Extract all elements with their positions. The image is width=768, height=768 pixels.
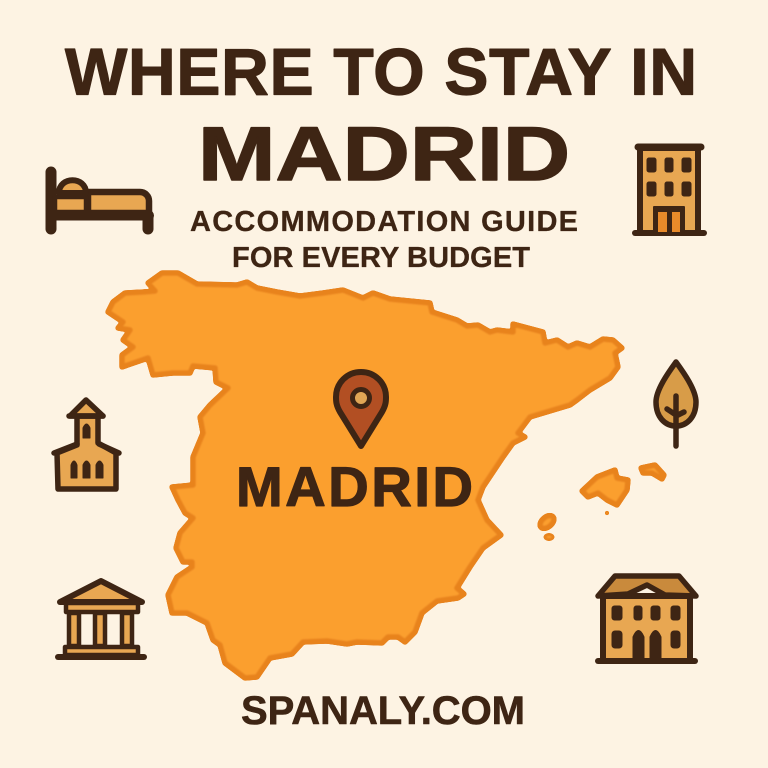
icon: tree xyxy=(656,362,696,446)
title: where to stay in: WHERE TO STAY IN xyxy=(65,34,697,108)
icon: church xyxy=(54,400,119,489)
island: Formentera xyxy=(545,534,553,540)
island: Mallorca xyxy=(582,470,628,505)
icon: apartment building xyxy=(635,147,704,233)
subtitle line 2: FOR EVERY BUDGET xyxy=(232,242,530,274)
island: Ibiza xyxy=(538,513,556,531)
footer website: SPANALY.COM xyxy=(241,689,525,733)
title: madrid: MADRID xyxy=(198,112,570,197)
icon: bed xyxy=(51,172,149,229)
map label: MADRID xyxy=(236,455,473,518)
island: Menorca xyxy=(641,465,664,479)
icon: mansion xyxy=(598,576,696,661)
subtitle line 1: ACCOMMODATION GUIDE xyxy=(190,206,578,238)
map pin xyxy=(336,372,386,446)
icon: classical temple xyxy=(58,581,144,657)
map of Spain xyxy=(108,273,664,678)
island: dot xyxy=(606,512,608,514)
mainland xyxy=(108,273,622,678)
